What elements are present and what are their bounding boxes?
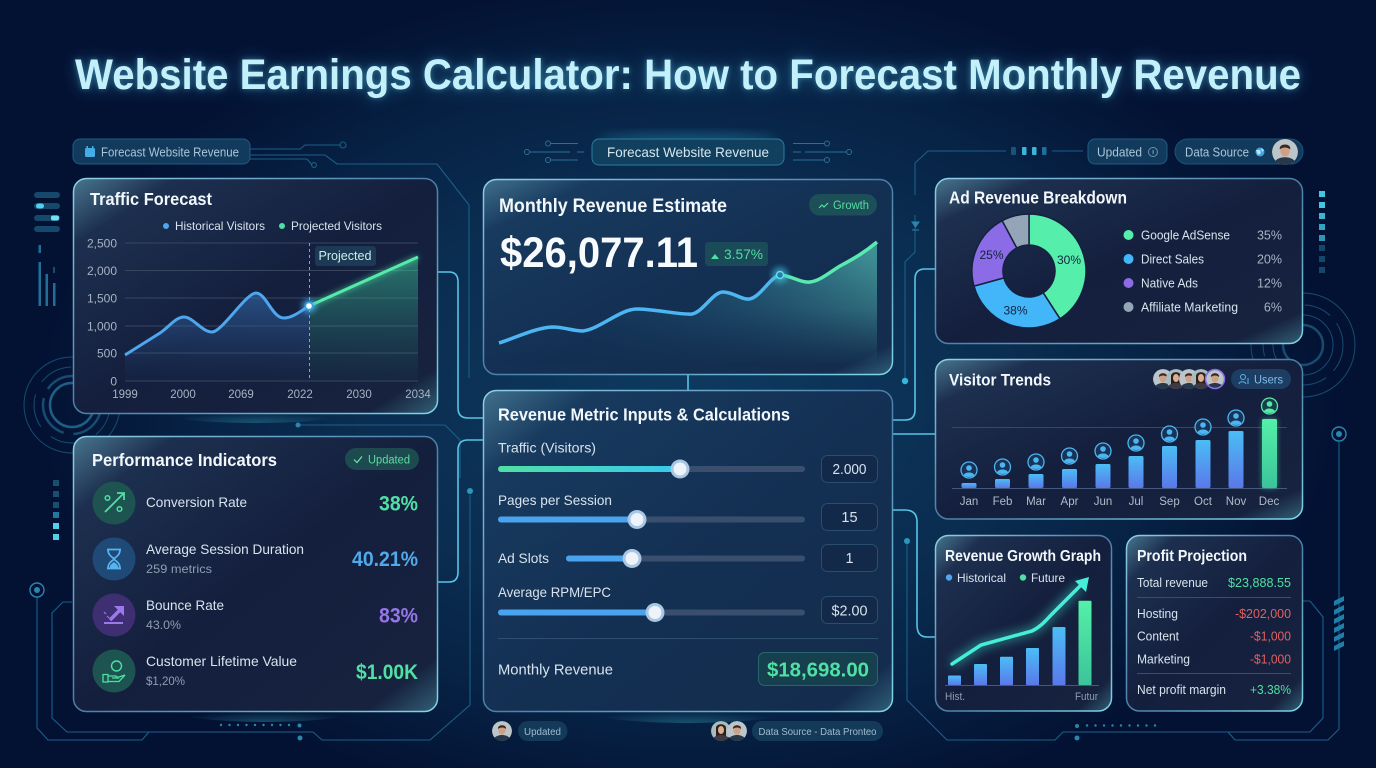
line chart: traffic: 1,500	[87, 292, 117, 306]
bar chart: visitors by month: Dec	[1259, 496, 1279, 508]
line chart: traffic: 2034	[405, 389, 431, 401]
footer: updated tag: Updated	[524, 726, 561, 738]
bar chart: visitors by month: Sep	[1159, 496, 1180, 508]
slider: pages per session	[498, 492, 878, 530]
badge: users: Users	[1254, 374, 1283, 386]
badge: growth	[809, 194, 877, 216]
legend: ad sources: 20%	[1257, 252, 1282, 266]
bar chart: visitors by month: Apr	[1061, 496, 1079, 508]
slider: ad slots: Ad Slots	[498, 550, 549, 566]
metric: conversion rate: 38%	[379, 492, 418, 516]
legend: ad sources: 35%	[1257, 228, 1282, 242]
slider: ad slots: 1	[845, 551, 854, 567]
legend: ad sources: Affiliate Marketing	[1141, 300, 1238, 314]
bar chart: visitors by month: Jul	[1129, 496, 1143, 508]
line chart: traffic: Projected	[318, 249, 372, 263]
bar chart: visitors by month: Mar	[1026, 496, 1046, 508]
table: profit rows: -$1,000	[1250, 630, 1291, 644]
donut chart: 25%	[979, 248, 1004, 262]
table: profit rows: +3.38%	[1250, 683, 1291, 697]
slider: average rpm/epc: $2.00	[832, 604, 868, 620]
bar and arrow chart: growth	[945, 577, 1099, 703]
badge: users	[1231, 369, 1291, 389]
line chart: traffic: 500	[97, 346, 117, 360]
footer: updated tag	[492, 721, 568, 741]
legend: visitors	[163, 219, 382, 233]
decorative circuit network	[24, 141, 1355, 740]
badge: 3.57%: 3.57%	[724, 246, 763, 262]
line chart: traffic: 2069	[228, 389, 254, 401]
table: profit rows: Hosting	[1137, 607, 1178, 621]
panel: revenue metric inputs and calculations	[484, 390, 892, 723]
donut chart: 38%	[1003, 304, 1028, 318]
legend: historical and future	[946, 571, 1065, 585]
badge: 3.57%	[705, 242, 768, 266]
metric: bounce rate	[92, 594, 418, 636]
metric: bounce rate: 83%	[379, 604, 418, 628]
bar chart: visitors by month: Oct	[1194, 496, 1213, 508]
title: Website Earnings Calculator: How to Forecast Monthly Revenue	[75, 51, 1301, 99]
metric: average session duration: 40.21%	[352, 548, 418, 571]
top-right pill: updated	[1088, 139, 1167, 164]
line chart: traffic: 2,500	[87, 236, 117, 250]
table: profit rows: Total revenue	[1137, 576, 1208, 590]
slider: average rpm/epc: Average RPM/EPC	[498, 584, 611, 600]
panel: ad revenue breakdown	[936, 178, 1302, 344]
table: profit rows	[1137, 576, 1291, 697]
heading: traffic forecast: Traffic Forecast	[90, 189, 212, 209]
panel: profit projection	[1126, 536, 1302, 711]
slider: pages per session: Pages per Session	[498, 492, 612, 508]
value: monthly revenue: $26,077.11	[500, 229, 698, 277]
legend: ad sources: 12%	[1257, 276, 1282, 290]
slider: ad slots	[498, 544, 878, 572]
heading: performance indicators: Performance Indicators	[92, 450, 277, 470]
legend: ad sources: 6%	[1264, 300, 1282, 314]
top-left pill: forecast website revenue: Forecast Website Revenue	[101, 146, 239, 160]
table: profit rows: Content	[1137, 630, 1180, 644]
metric: customer lifetime value	[92, 650, 418, 692]
badge: updated: Updated	[368, 454, 410, 466]
table: profit rows: $23,888.55	[1228, 576, 1291, 590]
heading: monthly revenue estimate: Monthly Revenue Estimate	[499, 195, 727, 217]
line chart: traffic: 1,000	[87, 320, 117, 334]
top-centre pill: forecast website revenue	[592, 133, 784, 165]
slider: average rpm/epc	[498, 584, 878, 624]
donut chart: 30%	[1057, 253, 1081, 267]
top-left pill: forecast website revenue	[73, 139, 250, 164]
bar chart: visitors by month	[952, 398, 1287, 508]
title: Website Earnings Calculator: How to Forecast Monthly Revenue	[75, 51, 1301, 99]
title: Website Earnings Calculator: How to Forecast Monthly Revenue	[75, 51, 1301, 99]
donut chart	[972, 214, 1086, 328]
top-right pill: updated: Updated	[1097, 146, 1142, 160]
badge: updated	[345, 448, 419, 470]
legend: ad sources	[1124, 228, 1282, 314]
legend: historical and future: Future	[1031, 571, 1065, 585]
heading: ad revenue breakdown: Ad Revenue Breakdown	[949, 188, 1127, 208]
slider: traffic	[498, 440, 878, 482]
panel: visitor trends	[936, 360, 1302, 519]
metric: bounce rate: 43.0%	[146, 618, 181, 632]
metric: conversion rate	[92, 482, 418, 524]
metric: average session duration	[92, 538, 418, 580]
bar and arrow chart: growth: Hist.	[945, 691, 965, 703]
metric: customer lifetime value: Customer Lifetime Value	[146, 653, 297, 669]
line chart: revenue	[499, 242, 877, 365]
result: monthly revenue	[498, 652, 878, 686]
bar chart: visitors by month: Nov	[1226, 496, 1246, 508]
result: monthly revenue: $18,698.00	[767, 660, 869, 682]
avatar group	[1153, 369, 1225, 389]
panel: performance indicators	[74, 436, 438, 722]
metric: bounce rate: Bounce Rate	[146, 597, 224, 613]
legend: visitors: Projected Visitors	[291, 219, 382, 233]
bar chart: visitors by month: Jun	[1094, 496, 1112, 508]
heading: profit projection: Profit Projection	[1137, 548, 1247, 565]
metric: customer lifetime value: $1,20%	[146, 674, 185, 688]
metric: average session duration: 259 metrics	[146, 562, 212, 576]
bar chart: visitors by month: Jan	[960, 496, 978, 508]
legend: ad sources: Direct Sales	[1141, 252, 1204, 266]
top-right pill: data source: Data Source	[1185, 146, 1249, 160]
legend: visitors: Historical Visitors	[175, 219, 265, 233]
top-centre pill: forecast website revenue: Forecast Website Revenue	[607, 144, 769, 160]
table: profit rows: Net profit margin	[1137, 683, 1226, 697]
panel: traffic forecast	[74, 178, 438, 423]
panel: revenue growth graph	[936, 536, 1112, 711]
panel: monthly revenue estimate	[484, 180, 892, 374]
metric: average session duration: Average Session Duration	[146, 541, 304, 557]
metric: customer lifetime value: $1.00K	[356, 661, 418, 684]
line chart: traffic: 1999	[112, 389, 138, 401]
table: profit rows: Marketing	[1137, 652, 1190, 666]
result: monthly revenue: Monthly Revenue	[498, 662, 613, 678]
legend: historical and future: Historical	[957, 571, 1006, 585]
line chart: traffic: 0	[110, 374, 117, 388]
badge: growth: Growth	[833, 200, 869, 212]
legend: ad sources: Native Ads	[1141, 276, 1198, 290]
heading: visitor trends: Visitor Trends	[949, 370, 1051, 390]
bar chart: visitors by month: Feb	[993, 496, 1012, 508]
legend: ad sources: Google AdSense	[1141, 228, 1230, 242]
line chart: traffic	[87, 236, 431, 401]
slider: pages per session: 15	[841, 510, 858, 526]
table: profit rows: -$1,000	[1250, 652, 1291, 666]
slider: traffic: Traffic (Visitors)	[498, 440, 596, 456]
table: profit rows: -$202,000	[1235, 607, 1291, 621]
line chart: traffic: 2022	[287, 389, 313, 401]
slider: traffic: 2.000	[832, 462, 866, 478]
top-right pill: data source	[1175, 139, 1303, 165]
line chart: traffic: 2030	[346, 389, 372, 401]
line chart: traffic: 2,000	[87, 264, 117, 278]
footer: data source tag	[711, 721, 883, 741]
heading: inputs: Revenue Metric Inputs & Calculations	[498, 404, 790, 424]
metric: conversion rate: Conversion Rate	[146, 494, 247, 510]
footer: data source tag: Data Source - Data Pronteo	[758, 726, 877, 738]
bar and arrow chart: growth: Futur	[1075, 691, 1098, 703]
heading: revenue growth graph: Revenue Growth Graph	[945, 548, 1101, 565]
line chart: traffic: 2000	[170, 389, 196, 401]
